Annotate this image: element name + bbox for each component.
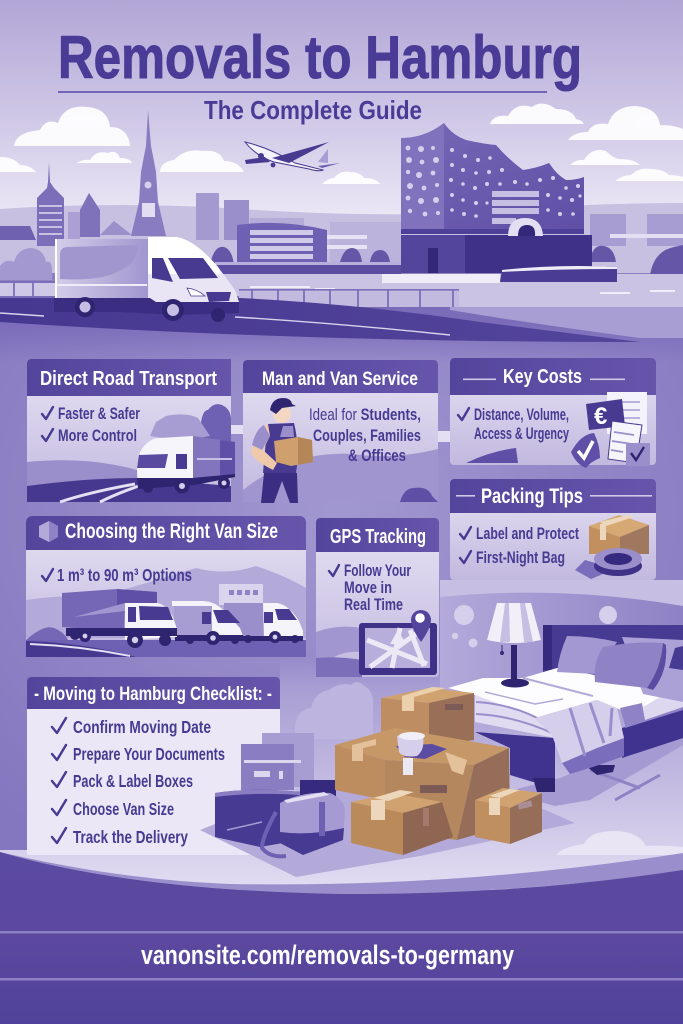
checklist: Confirm Moving Date [73,717,211,737]
front box [351,793,442,813]
cardboard boxes [335,687,542,855]
panel: Packing Tips [450,479,656,580]
checklist: Track the Delivery [73,827,188,847]
blanket [562,738,624,774]
luggage and moving boxes [200,687,575,877]
tablet map [359,623,437,675]
footer band [0,852,683,1024]
arch [508,218,543,236]
left tower [37,162,64,246]
bed base [475,708,683,782]
middle box [335,728,509,765]
description: Access & Urgency [474,425,570,443]
list: Faster & Safer [58,404,140,423]
façade bands [492,191,539,197]
base [401,235,592,273]
subtitle: The Complete Guide [204,95,422,125]
list: More Control [58,426,137,445]
option line [42,565,192,585]
road [0,296,683,322]
headboard [543,625,683,687]
title: Removals to Hamburg [58,24,582,91]
panel: Moving to Hamburg Checklist [27,677,280,855]
header [316,518,439,552]
header [27,359,231,396]
list [460,524,579,567]
header [450,358,656,395]
description [458,406,570,443]
trees [0,245,683,280]
duffel bag [262,792,345,856]
hills [243,449,438,502]
small van with sign [219,584,303,643]
airplane [245,142,340,171]
pillows [622,637,683,702]
heading: Choosing the Right Van Size [65,520,278,543]
hero illustration: Hamburg skyline [0,103,683,362]
description: Real Time [344,596,403,614]
header [27,677,280,709]
worker carrying box [251,398,313,503]
glass crown [401,123,584,230]
panel: Man and Van Service [243,360,438,503]
landscape [26,566,306,638]
icon: map pin [411,610,431,642]
description [329,562,411,614]
background: mid section [0,300,683,900]
medium van [172,601,243,645]
rug [505,725,683,806]
background: sky [0,0,683,240]
small buildings [0,193,683,262]
heading: Key Costs [503,366,582,388]
icon: box [39,521,58,542]
header [243,360,438,393]
list: Label and Protect [476,524,579,543]
description: Distance, Volume, [474,406,569,424]
right box [475,788,542,808]
heading: Packing Tips [481,485,583,508]
description: & Offices [348,446,406,465]
cost icons [571,392,650,468]
paper stack [241,733,314,790]
checklist [52,717,225,847]
fence [0,281,459,307]
checklist: Pack & Label Boxes [73,771,193,791]
clouds [0,103,683,184]
plaza slabs [382,274,500,283]
bridge [215,262,401,274]
header [26,516,306,550]
wall bubbles [452,605,617,648]
floor cloud [556,831,683,855]
heading: GPS Tracking [330,526,426,548]
panel: GPS Tracking [316,518,439,677]
room illustration: bed, lamp [0,580,683,890]
Elbphilharmonie [401,123,592,273]
landscape [316,627,362,664]
box and tape [575,515,649,579]
bed [448,625,683,792]
floor [0,658,683,890]
list [42,404,140,445]
floor shadow [200,790,575,877]
mattress [448,668,683,720]
cost icons: € [594,403,607,430]
heading: Direct Road Transport [40,368,217,390]
lamp [487,603,541,688]
delivery van [54,237,239,322]
description [309,405,421,465]
description: Follow Your [344,562,411,580]
water [215,274,683,308]
cloud behind boxes [295,682,373,739]
heading: - Moving to Hamburg Checklist: - [34,684,272,705]
option line: 1 m³ to 90 m³ Options [57,565,192,585]
checklist: Prepare Your Documents [73,744,225,764]
description: Couples, Families [313,426,421,445]
church spire [131,110,166,236]
list: First-Night Bag [476,548,565,567]
panel: Direct Road Transport [27,359,235,502]
checklist: Choose Van Size [73,799,174,819]
top box [381,688,474,703]
connector strip [231,425,244,434]
description: Move in [344,579,392,597]
panel: Choosing the Right Van Size [26,516,306,657]
illustration: landscape [27,404,231,502]
heading: Man and Van Service [262,369,418,390]
wall [440,580,683,700]
website url: vanonsite.com/removals-to-germany [141,940,514,970]
header [450,479,656,513]
truck [137,436,235,494]
distant hills [0,203,683,273]
modern building [237,223,327,262]
large truck [62,589,177,648]
panel: Key Costs [450,358,656,468]
suitcase [215,780,336,847]
mug on boxes [396,744,447,759]
description: Ideal for Students, [309,405,421,424]
